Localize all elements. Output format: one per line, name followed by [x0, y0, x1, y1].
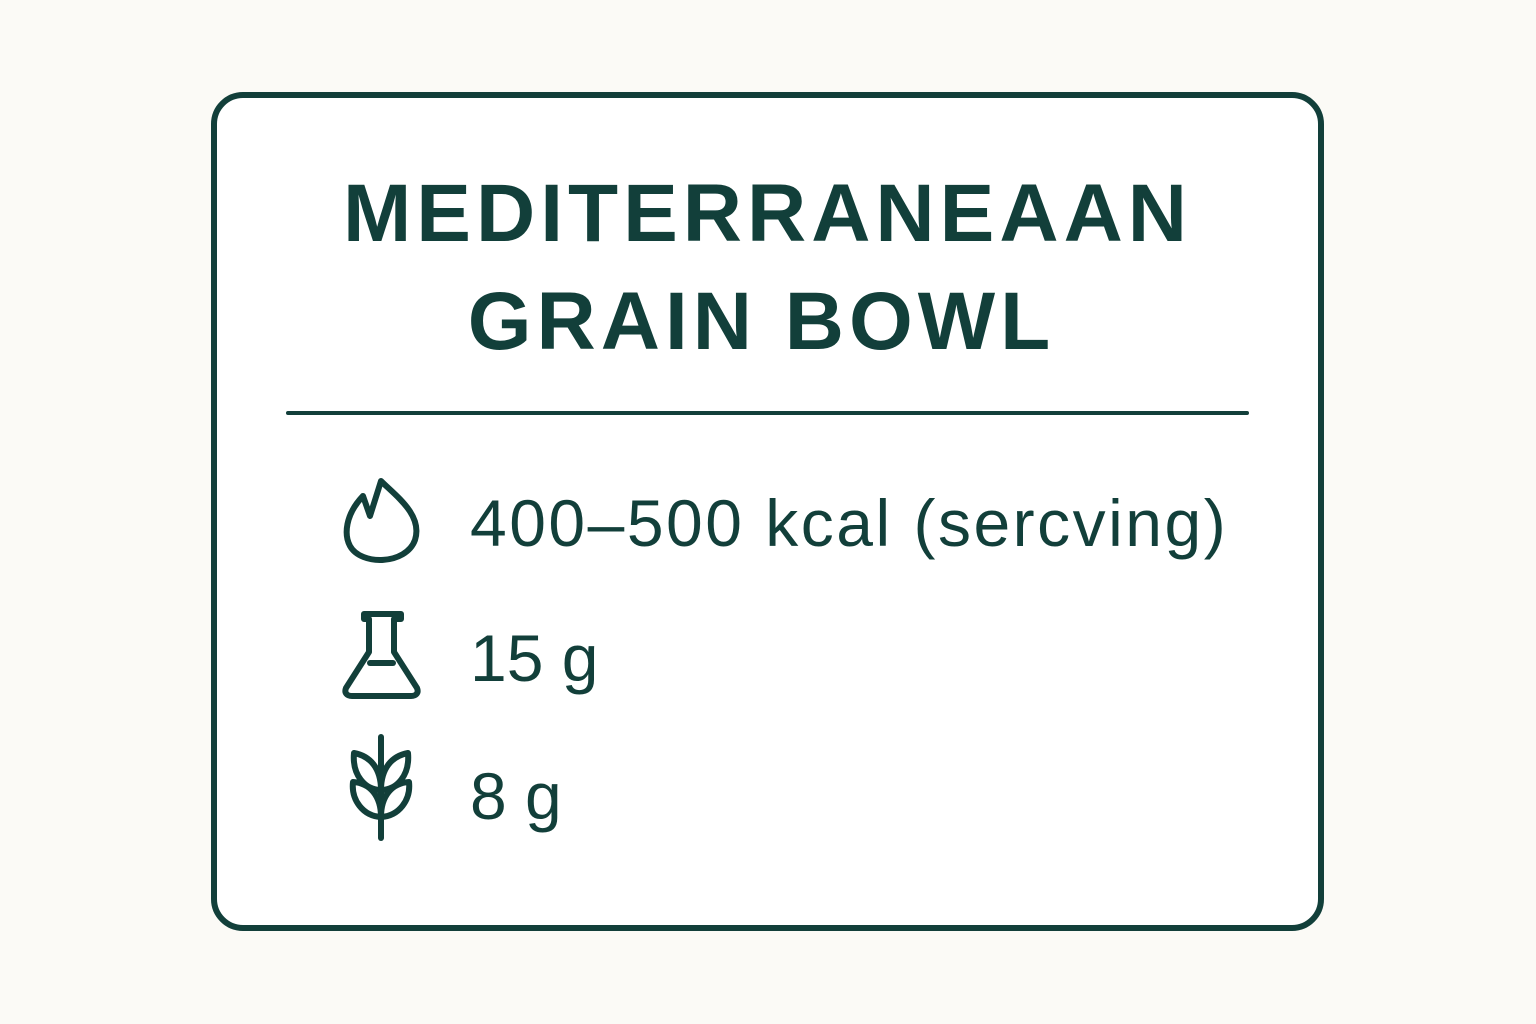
title: [343, 168, 1192, 367]
title: MEDITERRANEAAN: [343, 168, 1192, 259]
text: protein: 15 g: [470, 621, 598, 695]
icon: flame: [347, 481, 416, 560]
text: calories: 400–500 kcal (sercving): [470, 486, 1228, 560]
panel: nutrition card: [211, 92, 1324, 931]
icon: wheat: [353, 737, 409, 838]
icon: flask: [345, 614, 418, 696]
text: fiber: 8 g: [470, 759, 562, 833]
title: GRAIN BOWL: [468, 276, 1055, 367]
